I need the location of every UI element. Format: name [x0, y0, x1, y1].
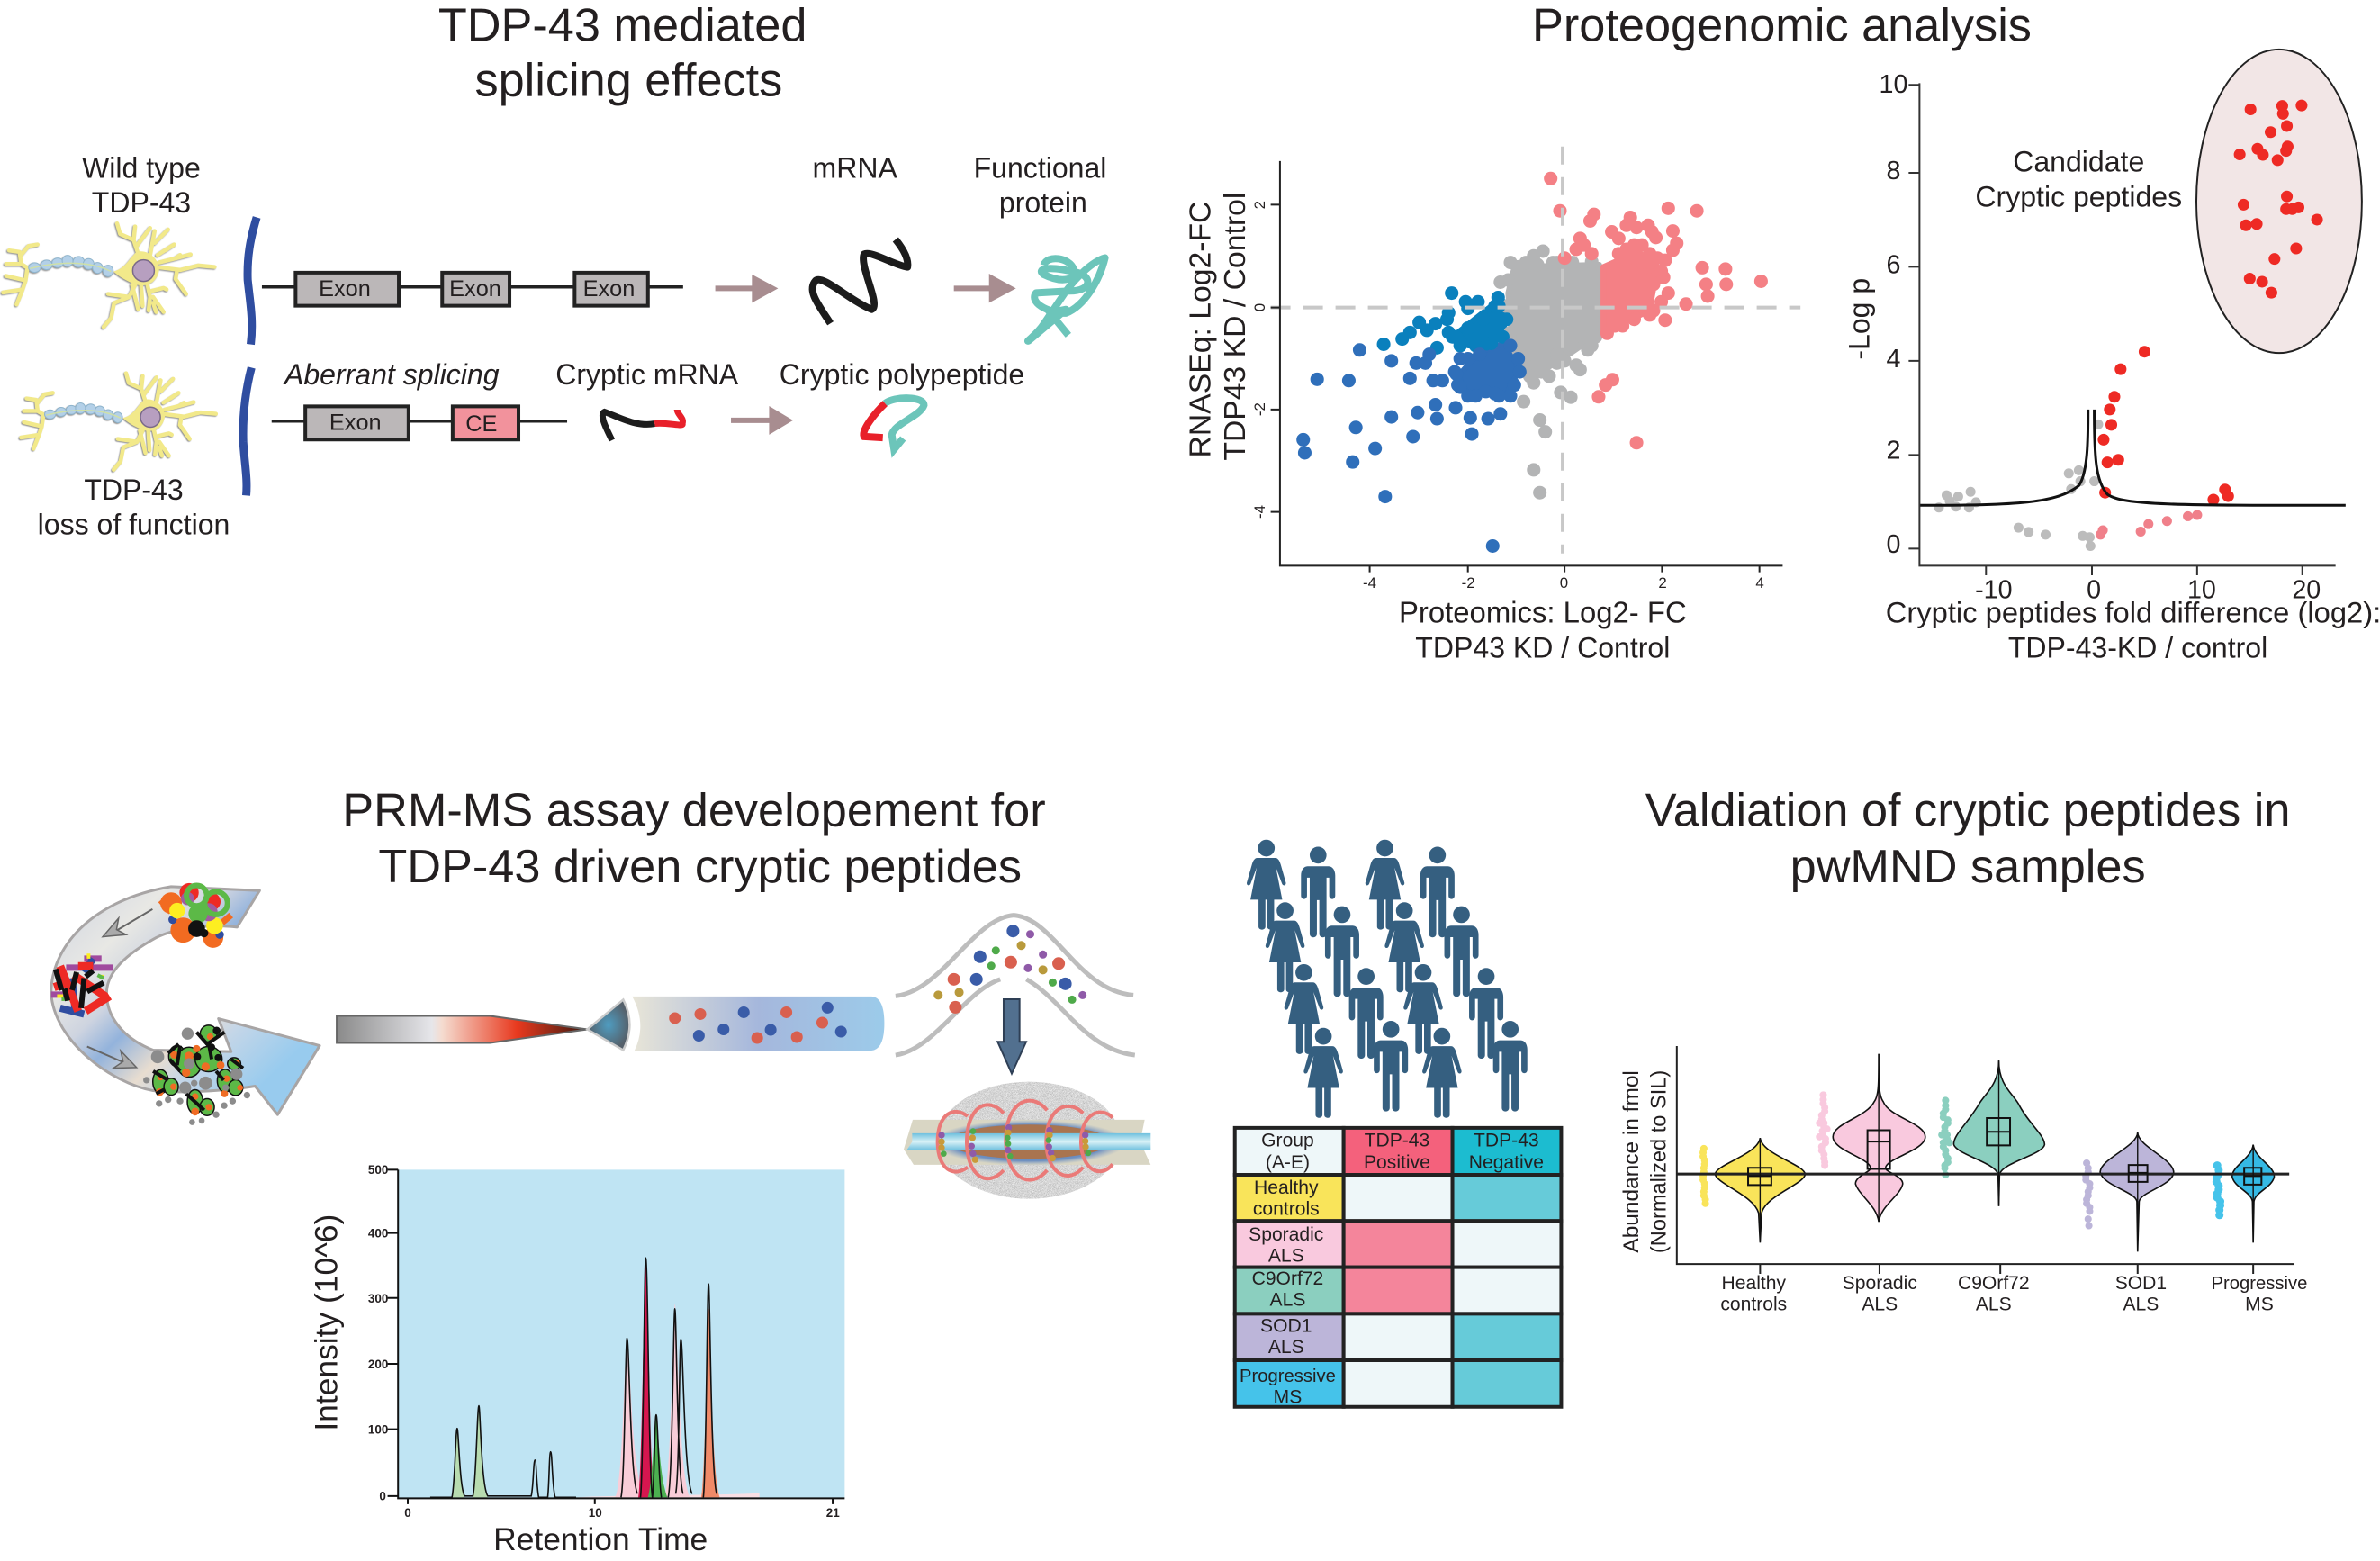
chart: proteomics vs RNAseq scatter: -4 [1363, 574, 1376, 591]
chart: proteomics vs RNAseq scatter: 0 [1560, 574, 1568, 591]
peptide cluster [143, 1025, 250, 1125]
label: TDP-43 loss of function: loss of function [38, 509, 230, 541]
axis label: proteomics x axis: TDP43 KD / Control [1415, 631, 1670, 663]
chart: cryptic peptide volcano plot [1880, 50, 2362, 605]
icon: patient cohort [1247, 840, 1528, 1118]
chromatogram tick labels: 400 [368, 1227, 388, 1241]
chromatogram tick labels: 300 [368, 1292, 388, 1305]
icon: neuron with TDP-43 loss of function [21, 374, 216, 470]
table text: TDP-43 [1365, 1131, 1429, 1151]
chart: cryptic peptide volcano plot: 10 [2187, 576, 2216, 605]
table text: Sporadic [1249, 1224, 1323, 1245]
ellipse: candidate peptides [2196, 50, 2362, 353]
label: mRNA: mRNA [813, 151, 898, 184]
gene diagram: three exons: Exon [319, 276, 371, 302]
icon: functional protein tangle [1028, 257, 1105, 341]
title: TDP-43 mediated splicing effects: splicing effects [474, 54, 782, 106]
table: groups by TDP-43 status [1235, 1128, 1561, 1407]
label: TDP-43 loss of function [38, 474, 230, 541]
axis label: retention time: Retention Time [493, 1521, 708, 1557]
table text: Positive [1364, 1152, 1430, 1173]
chromatogram tick labels: 10 [589, 1506, 602, 1520]
chart: cryptic peptide volcano plot: 8 [1887, 157, 1900, 185]
label: functional protein: protein [999, 186, 1087, 219]
icon: proteolysis cycle arrow [51, 883, 320, 1125]
chart: proteomics vs RNAseq scatter [1251, 147, 1800, 591]
chart: cryptic peptide volcano plot: 10 [1880, 70, 1907, 99]
table text [1240, 1131, 1544, 1408]
gene diagram: three exons: Exon [449, 276, 501, 302]
icon: quadrupole ion selection [896, 916, 1135, 1055]
arrow: down to mass analyser [997, 999, 1026, 1074]
axis label: proteomics x axis [1399, 596, 1687, 663]
panel: PRM-MS assay development [51, 785, 1150, 1557]
gene diagram: exon and cryptic exon: Exon [329, 410, 382, 435]
arrow: cryptic mRNA to polypeptide [731, 406, 793, 435]
axis label: abundance in fmol [1619, 1070, 1671, 1253]
chart: proteomics vs RNAseq scatter: 2 [1251, 201, 1268, 209]
violin group labels: C9Orf72 [1958, 1273, 2030, 1294]
axis label: abundance in fmol: Abundance in fmol [1619, 1070, 1644, 1253]
axis label: cryptic peptides fold difference: TDP-43-KD / control [2008, 631, 2267, 663]
label: wild type TDP-43 [82, 151, 201, 219]
title: validation of cryptic peptides in pwMND samples: Valdiation of cryptic peptides in [1645, 785, 2290, 837]
axis label: intensity: Intensity (10^6) [309, 1214, 345, 1431]
table text: C9Orf72 [1252, 1268, 1323, 1289]
axis label: proteomics x axis: Proteomics: Log2- FC [1399, 596, 1687, 629]
axis label: RNASEq y axis [1183, 193, 1252, 461]
title: validation of cryptic peptides in pwMND samples: pwMND samples [1790, 841, 2146, 893]
label: TDP-43 loss of function: TDP-43 [84, 474, 184, 506]
table text: ALS [1268, 1246, 1304, 1267]
table text: Group [1261, 1131, 1314, 1151]
violin group labels: ALS [1976, 1295, 2012, 1315]
icon: mass analyser [904, 1082, 1150, 1199]
chromatogram tick labels: 100 [368, 1422, 388, 1436]
table text: controls [1253, 1198, 1320, 1219]
arrow: mRNA to protein [954, 274, 1016, 302]
table text: SOD1 [1260, 1315, 1312, 1336]
chart: proteomics vs RNAseq scatter: -2 [1251, 402, 1268, 416]
label: wild type TDP-43: TDP-43 [92, 186, 191, 219]
label: functional protein [974, 151, 1106, 219]
label: wild type TDP-43: Wild type [82, 151, 201, 184]
title: Proteogenomic analysis: Proteogenomic analysis [1532, 0, 2032, 52]
axis label: cryptic peptides fold difference: Cryptic peptides fold difference (log2): [1886, 596, 2380, 629]
table text: TDP-43 [1474, 1131, 1539, 1151]
table text: ALS [1268, 1337, 1304, 1358]
chart: cryptic peptide volcano plot: 0 [2087, 576, 2101, 605]
chart: proteomics vs RNAseq scatter: -4 [1251, 505, 1268, 519]
table text: Progressive [1240, 1367, 1336, 1386]
violin group labels: SOD1 [2115, 1273, 2167, 1294]
violin group labels: MS [2245, 1295, 2274, 1315]
table text: ALS [1270, 1290, 1305, 1311]
icon: electrospray tip [587, 999, 629, 1051]
arrow: gene to mRNA [716, 275, 778, 302]
violin group labels: Progressive [2212, 1274, 2307, 1294]
title: TDP-43 mediated splicing effects: TDP-43 mediated [438, 0, 807, 52]
title: TDP-43 mediated splicing effects [438, 0, 807, 106]
panel: proteogenomic analysis [1183, 0, 2380, 663]
table text: (A-E) [1266, 1152, 1310, 1173]
axis label: cryptic peptides fold difference [1886, 596, 2380, 663]
icon: chromatography column fragment [337, 1015, 587, 1043]
violin group labels: controls [1720, 1295, 1787, 1315]
chart: proteomics vs RNAseq scatter: 4 [1755, 574, 1764, 591]
panel: validation of cryptic peptides [1235, 785, 2307, 1408]
title: PRM-MS assay developement: TDP-43 driven cryptic peptides [378, 841, 1022, 893]
axis label: abundance in fmol: (Normalized to SIL) [1647, 1070, 1671, 1253]
chart: cryptic peptide volcano plot: 4 [1887, 345, 1901, 374]
icon: healthy neuron [3, 223, 214, 327]
digesting peptides [51, 953, 113, 1015]
gene diagram: three exons: Exon [583, 276, 635, 302]
chromatogram tick labels: 21 [826, 1506, 840, 1520]
chart: cryptic peptide volcano plot: -10 [1975, 576, 2013, 605]
axis label: RNASEq y axis: TDP43 KD / Control [1218, 193, 1252, 461]
violin group labels: ALS [1862, 1295, 1898, 1315]
axis label: RNASEq y axis: RNASEq: Log2-FC [1183, 202, 1217, 457]
axis label: -Log p: -Log p [1843, 278, 1875, 360]
violin group labels: ALS [2123, 1295, 2159, 1315]
violin group labels: Healthy [1722, 1273, 1786, 1294]
table text: Healthy [1254, 1178, 1319, 1198]
chromatogram tick labels: 0 [379, 1490, 386, 1503]
table text: MS [1274, 1387, 1302, 1408]
chromatogram tick labels: 500 [368, 1163, 388, 1177]
label: candidate cryptic peptides: Cryptic peptides [1975, 180, 2182, 212]
intact protein cluster [160, 883, 231, 948]
icon: cryptic polypeptide [863, 398, 924, 449]
icon: ion transfer tube [632, 997, 884, 1051]
chromatogram tick labels: 0 [404, 1506, 411, 1520]
chart: cryptic peptide volcano plot: 20 [2292, 576, 2321, 605]
chart: proteomics vs RNAseq scatter: -2 [1462, 574, 1475, 591]
chromatogram tick labels [368, 1163, 840, 1520]
icon: chromosome strand top [248, 217, 257, 345]
title: validation of cryptic peptides in pwMND samples [1645, 785, 2290, 893]
violin group labels: Sporadic [1843, 1273, 1917, 1294]
chart: cryptic peptide volcano plot: 6 [1887, 251, 1900, 280]
label: candidate cryptic peptides: Candidate [2013, 146, 2144, 178]
chart: cryptic peptide volcano plot: 2 [1887, 436, 1900, 465]
chart: cryptic peptide volcano plot: 0 [1887, 530, 1900, 559]
gene diagram: exon and cryptic exon: CE [465, 411, 497, 437]
title: PRM-MS assay developement [342, 785, 1046, 893]
chart: violin plots [1677, 1046, 2294, 1274]
chromatogram tick labels: 200 [368, 1358, 388, 1371]
label: cryptic polypeptide: Cryptic polypeptide [780, 358, 1024, 391]
chart: proteomics vs RNAseq scatter: 0 [1251, 303, 1268, 311]
label: cryptic mRNA: Cryptic mRNA [555, 358, 739, 391]
chart: chromatogram [388, 1169, 844, 1504]
label: functional protein: Functional [974, 151, 1106, 184]
icon: mRNA squiggle [813, 239, 907, 323]
violin group labels [1720, 1273, 2307, 1315]
table text: Negative [1469, 1152, 1544, 1173]
label: aberrant splicing: Aberrant splicing [283, 358, 500, 391]
icon: cryptic mRNA [602, 410, 682, 440]
title: PRM-MS assay developement: PRM-MS assay developement for [342, 785, 1046, 837]
chart: proteomics vs RNAseq scatter: 2 [1658, 574, 1667, 591]
gene diagram: exon and cryptic exon [272, 406, 567, 439]
icon: chromosome strand bottom [243, 367, 251, 495]
gene diagram: three exons [262, 273, 683, 306]
label: candidate cryptic peptides [1975, 146, 2182, 212]
panel: TDP-43 mediated splicing effects [3, 0, 1106, 541]
